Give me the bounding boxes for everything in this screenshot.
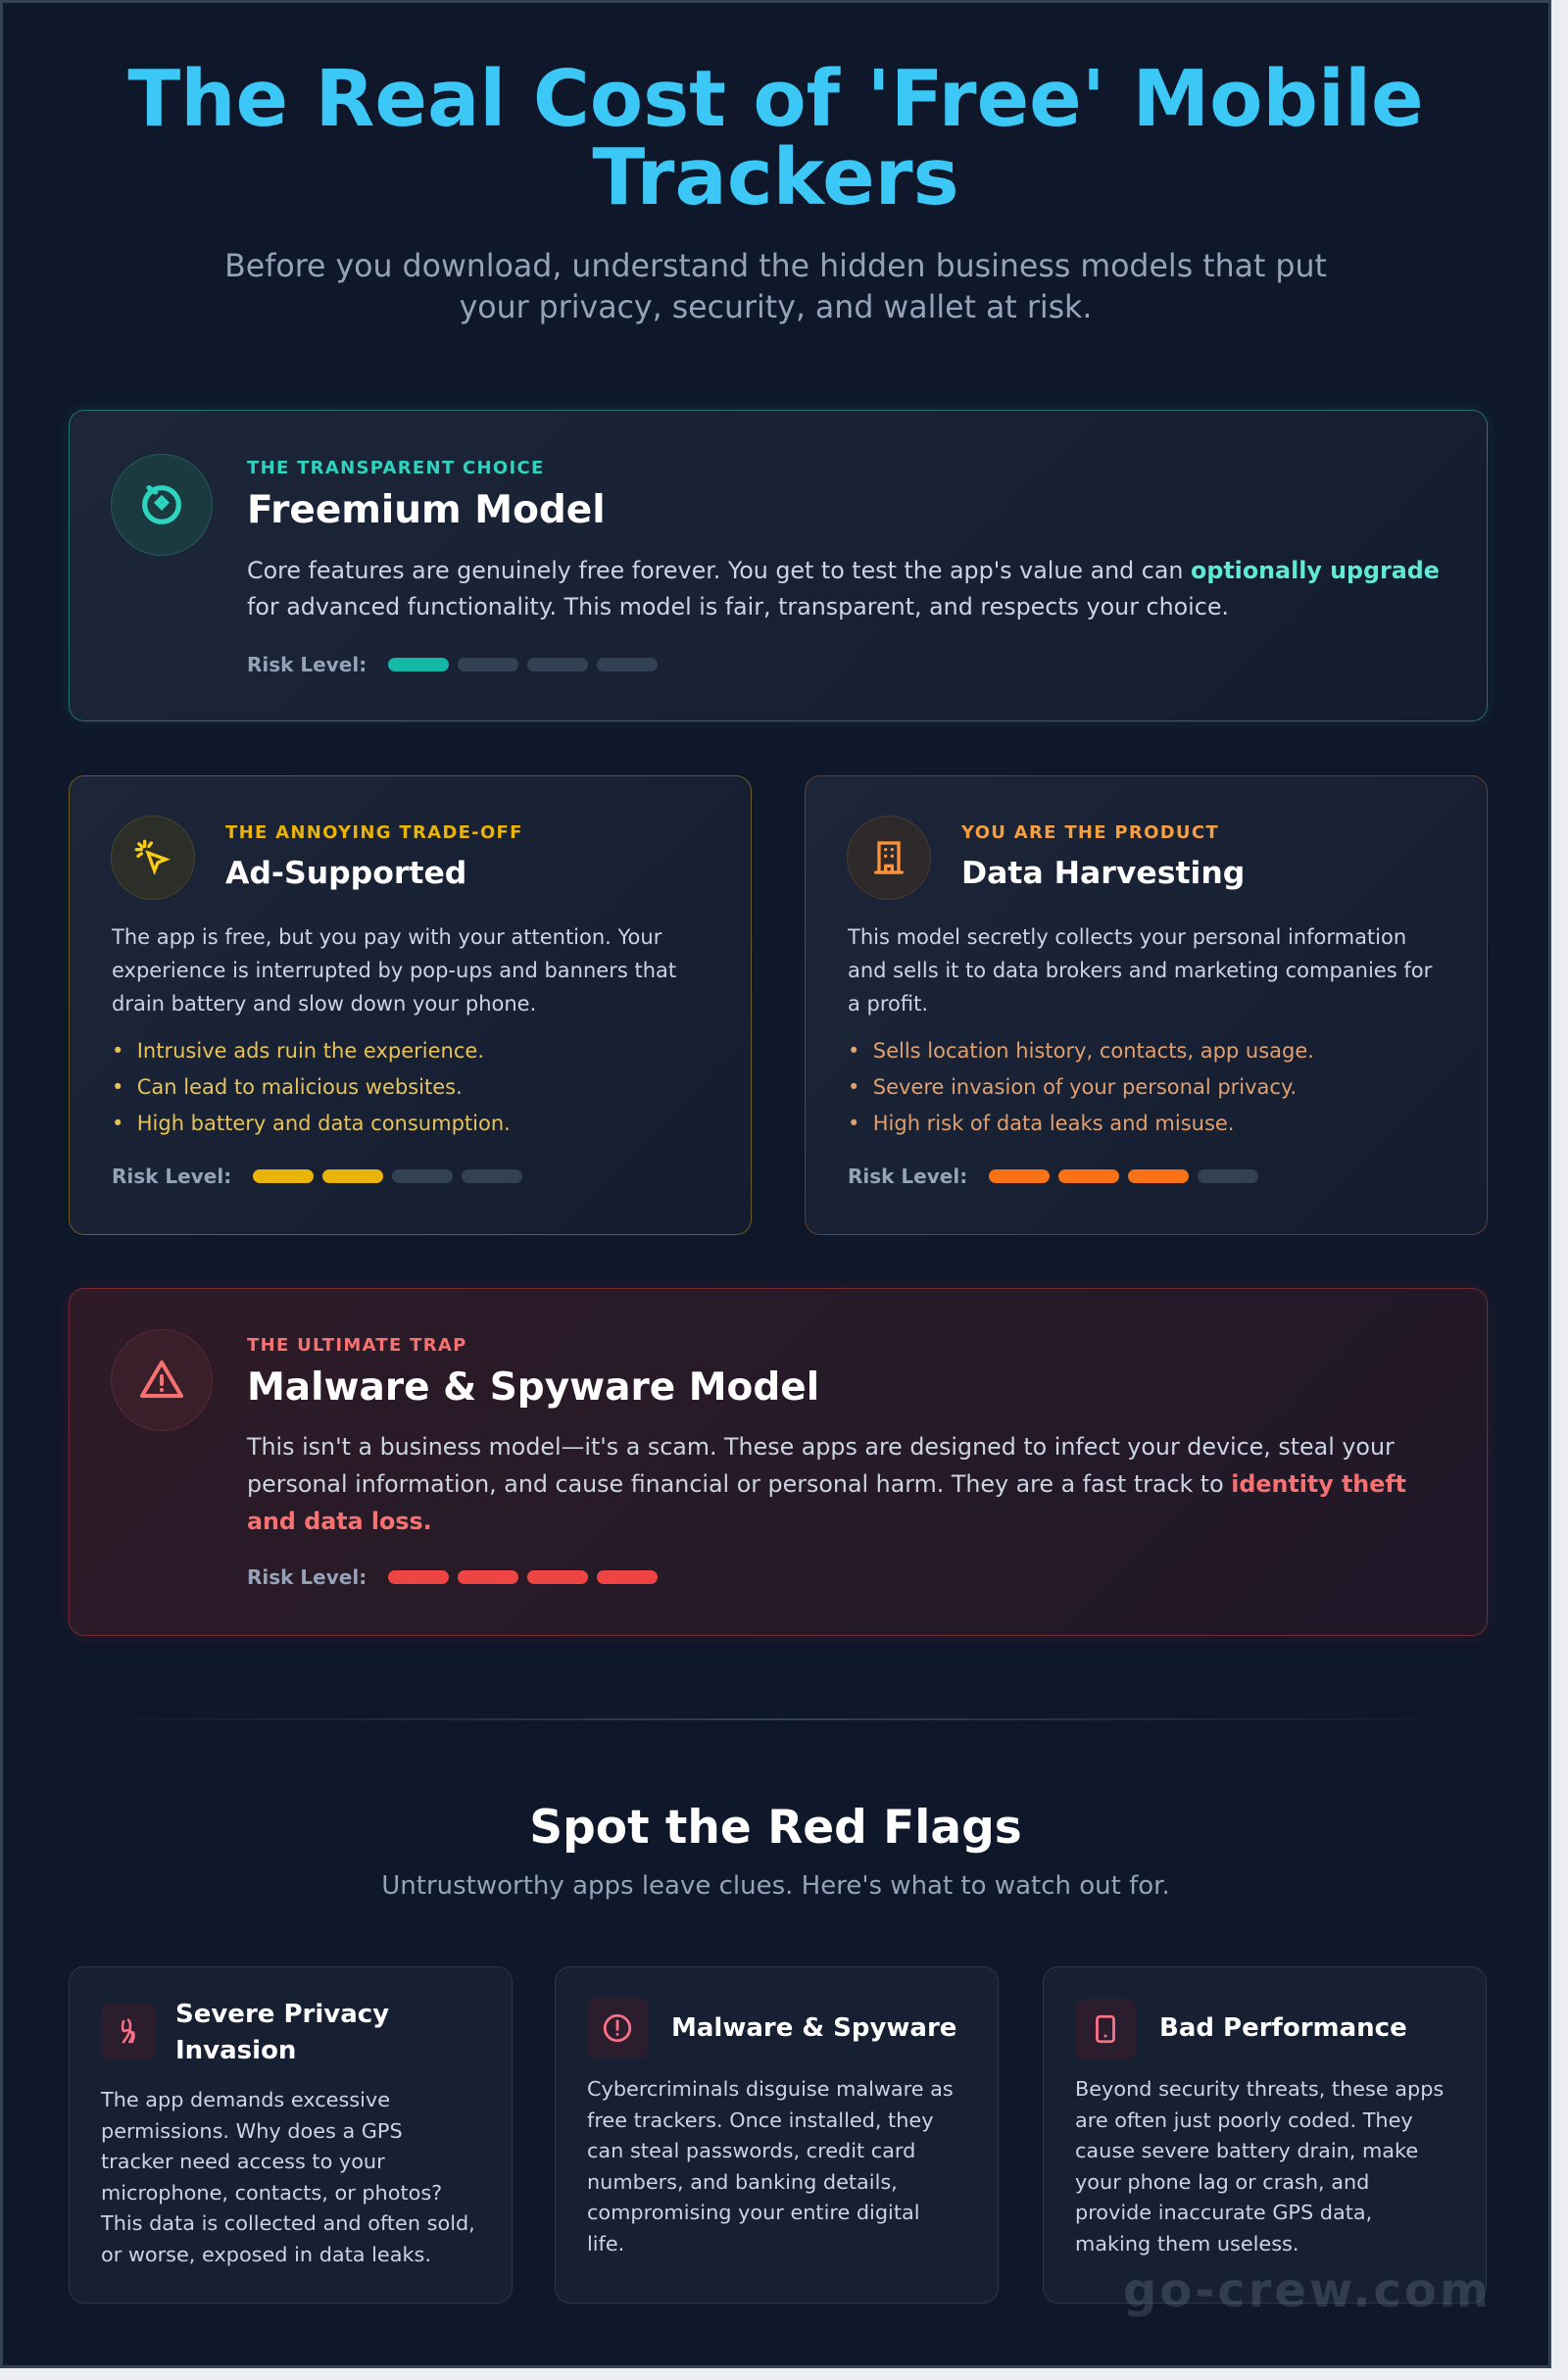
- icon: phone: [1075, 1999, 1136, 2059]
- icon: building: [847, 816, 931, 900]
- text block: microphone, contacts, or photos?: [101, 2180, 442, 2204]
- text block: a profit.: [848, 992, 928, 1016]
- subtitle: red flags: Untrustworthy apps leave clues. Here's what to watch out for.: [381, 1871, 1170, 1901]
- icon: fingerprint: [101, 2003, 156, 2059]
- risk meter: [112, 1165, 522, 1188]
- text block: The app demands excessive: [101, 2088, 390, 2111]
- text block: can steal passwords, credit card: [587, 2139, 915, 2162]
- risk meter: [247, 653, 658, 676]
- text block: This model secretly collects your personal information: [848, 925, 1406, 949]
- subtitle: Before you download, understand the hidden business models that put: [224, 249, 1327, 284]
- panel: freemium: [69, 410, 1488, 721]
- risk meter: Risk Level:: [112, 1165, 231, 1188]
- text block: [112, 925, 676, 1016]
- icon: freemium: [111, 454, 213, 556]
- heading: Data Harvesting: [961, 856, 1245, 891]
- text block: provide inaccurate GPS data,: [1075, 2201, 1372, 2224]
- text block: Cybercriminals disguise malware as: [587, 2077, 954, 2101]
- bullet list: [112, 1039, 511, 1135]
- panel: privacy invasion: [69, 1966, 513, 2304]
- bullet list: • High risk of data leaks and misuse.: [848, 1112, 1234, 1135]
- text block: your phone lag or crash, and: [1075, 2170, 1369, 2194]
- heading: red flags: Spot the Red Flags: [529, 1801, 1022, 1855]
- bullet list: [848, 1039, 1314, 1135]
- text block: drain battery and slow down your phone.: [112, 992, 536, 1016]
- text block: The app is free, but you pay with your attention. Your: [112, 925, 662, 949]
- subtitle: [224, 249, 1327, 325]
- panel: ad-supported: [69, 775, 752, 1235]
- text block: compromising your entire digital: [587, 2201, 919, 2224]
- label: YOU ARE THE PRODUCT: [961, 822, 1219, 843]
- text block: or worse, exposed in data leaks.: [101, 2243, 431, 2266]
- bullet list: • High battery and data consumption.: [112, 1112, 511, 1135]
- text block: for advanced functionality. This model is fair, transparent, and respects your choice.: [247, 593, 1229, 620]
- heading: Freemium Model: [247, 488, 606, 532]
- icon: cursor click: [111, 816, 195, 900]
- heading: Bad Performance: [1159, 2013, 1407, 2043]
- heading: Invasion: [175, 2036, 296, 2065]
- heading: Malware & Spyware Model: [247, 1365, 819, 1410]
- text block: [247, 557, 1440, 620]
- text block: [247, 1433, 1406, 1535]
- text block: [100, 2088, 475, 2266]
- heading: Malware & Spyware: [671, 2013, 956, 2043]
- title: The Real Cost of 'Free' Mobile: [127, 54, 1424, 144]
- label: THE ULTIMATE TRAP: [247, 1335, 467, 1356]
- heading: Ad-Supported: [225, 856, 466, 891]
- text block: This data is collected and often sold,: [101, 2211, 475, 2235]
- text block: and sells it to data brokers and marketing companies for: [848, 959, 1432, 982]
- bullet list: • Can lead to malicious websites.: [112, 1075, 463, 1099]
- risk meter: Risk Level:: [247, 1565, 367, 1589]
- icon: warning: [111, 1329, 213, 1431]
- text block: experience is interrupted by pop-ups and banners that: [112, 959, 676, 982]
- text block: This isn't a business model—it's a scam. These apps are designed to infect your device, steal your: [247, 1433, 1395, 1461]
- text block: are often just poorly coded. They: [1075, 2107, 1413, 2131]
- text block: free trackers. Once installed, they: [587, 2107, 933, 2131]
- text block: numbers, and banking details,: [587, 2170, 898, 2194]
- text block: personal information, and cause financial or personal harm. They are a fast track to identity theft: [247, 1470, 1406, 1498]
- panel: data harvesting: [805, 775, 1488, 1235]
- icon: alert circle: [587, 1998, 648, 2058]
- bullet list: • Intrusive ads ruin the experience.: [112, 1039, 484, 1063]
- title: [127, 54, 1424, 223]
- text block: cause severe battery drain, make: [1075, 2139, 1418, 2162]
- panel: malware spyware: [555, 1966, 999, 2304]
- text block: [587, 2077, 954, 2255]
- heading: [175, 2000, 389, 2065]
- watermark: go-crew.com: [1123, 2263, 1492, 2318]
- label: THE ANNOYING TRADE-OFF: [225, 822, 523, 843]
- text block: tracker need access to your: [101, 2150, 385, 2173]
- text block: [1075, 2077, 1444, 2255]
- label: THE TRANSPARENT CHOICE: [247, 458, 545, 478]
- bullet list: • Sells location history, contacts, app usage.: [848, 1039, 1314, 1063]
- risk meter: [848, 1165, 1258, 1188]
- text block: and data loss.: [247, 1508, 432, 1535]
- risk meter: [247, 1565, 658, 1589]
- bullet list: • Severe invasion of your personal privacy.: [848, 1075, 1297, 1099]
- text block: permissions. Why does a GPS: [101, 2119, 403, 2143]
- subtitle: your privacy, security, and wallet at risk.: [460, 290, 1092, 325]
- title: Trackers: [592, 132, 959, 223]
- risk meter: Risk Level:: [247, 653, 367, 676]
- text block: Beyond security threats, these apps: [1075, 2077, 1444, 2101]
- text block: making them useless.: [1075, 2231, 1298, 2255]
- text block: [847, 925, 1433, 1016]
- heading: Severe Privacy: [175, 2000, 389, 2029]
- panel: bad performance: [1043, 1966, 1487, 2304]
- risk meter: Risk Level:: [848, 1165, 967, 1188]
- text block: life.: [587, 2231, 624, 2255]
- panel: malware: [69, 1288, 1488, 1636]
- text block: Core features are genuinely free forever. You get to test the app's value and can optionally upgrade: [247, 557, 1440, 584]
